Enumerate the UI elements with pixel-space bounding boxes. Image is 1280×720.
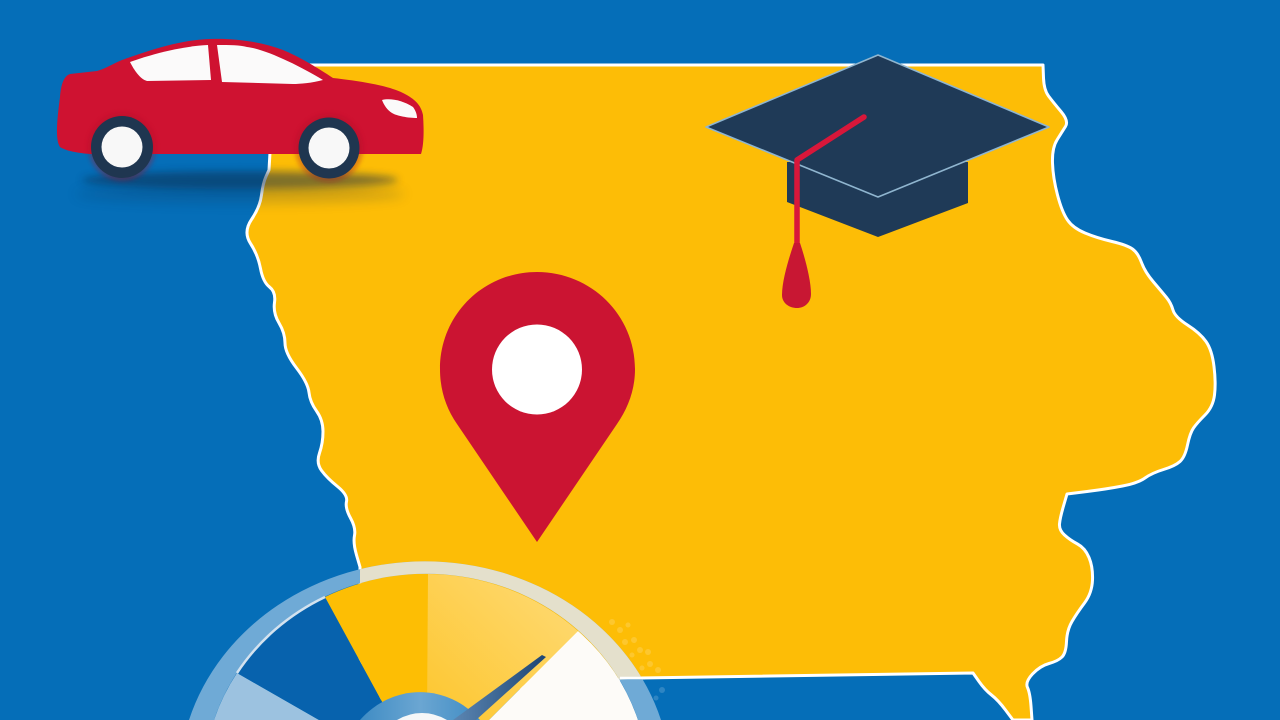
cap base [787, 162, 968, 237]
map: Iowa state shape [247, 65, 1215, 720]
car body [57, 39, 424, 154]
state border over rim [620, 677, 645, 679]
gauge segment: white [489, 631, 638, 720]
gauge segment: dark blue [237, 597, 392, 720]
icon: location pin [440, 272, 635, 542]
gauge sparkle dots [609, 619, 665, 700]
car headlight [382, 99, 417, 118]
cap board [706, 55, 1049, 197]
gauge rim highlight [237, 597, 325, 673]
car front window [217, 45, 323, 84]
icon: red car [57, 39, 424, 182]
gauge needle [453, 655, 546, 720]
gauge hub [360, 692, 480, 720]
tassel cord [797, 117, 864, 245]
gauge segment: light blue [214, 673, 319, 720]
gauge segment: yellow [325, 574, 428, 720]
car rear window [130, 45, 211, 81]
gauge rim on blue [189, 561, 661, 720]
gauge rim on yellow [360, 561, 641, 680]
car front wheel [295, 114, 363, 182]
car rear wheel [88, 113, 156, 181]
tassel end [782, 243, 811, 308]
pin centre circle [492, 324, 582, 414]
gauge [189, 561, 665, 720]
gauge segment: light yellow [427, 574, 578, 720]
car shadow [75, 171, 405, 203]
gauge hub centre [397, 713, 447, 720]
icon: graduation cap [706, 55, 1049, 308]
